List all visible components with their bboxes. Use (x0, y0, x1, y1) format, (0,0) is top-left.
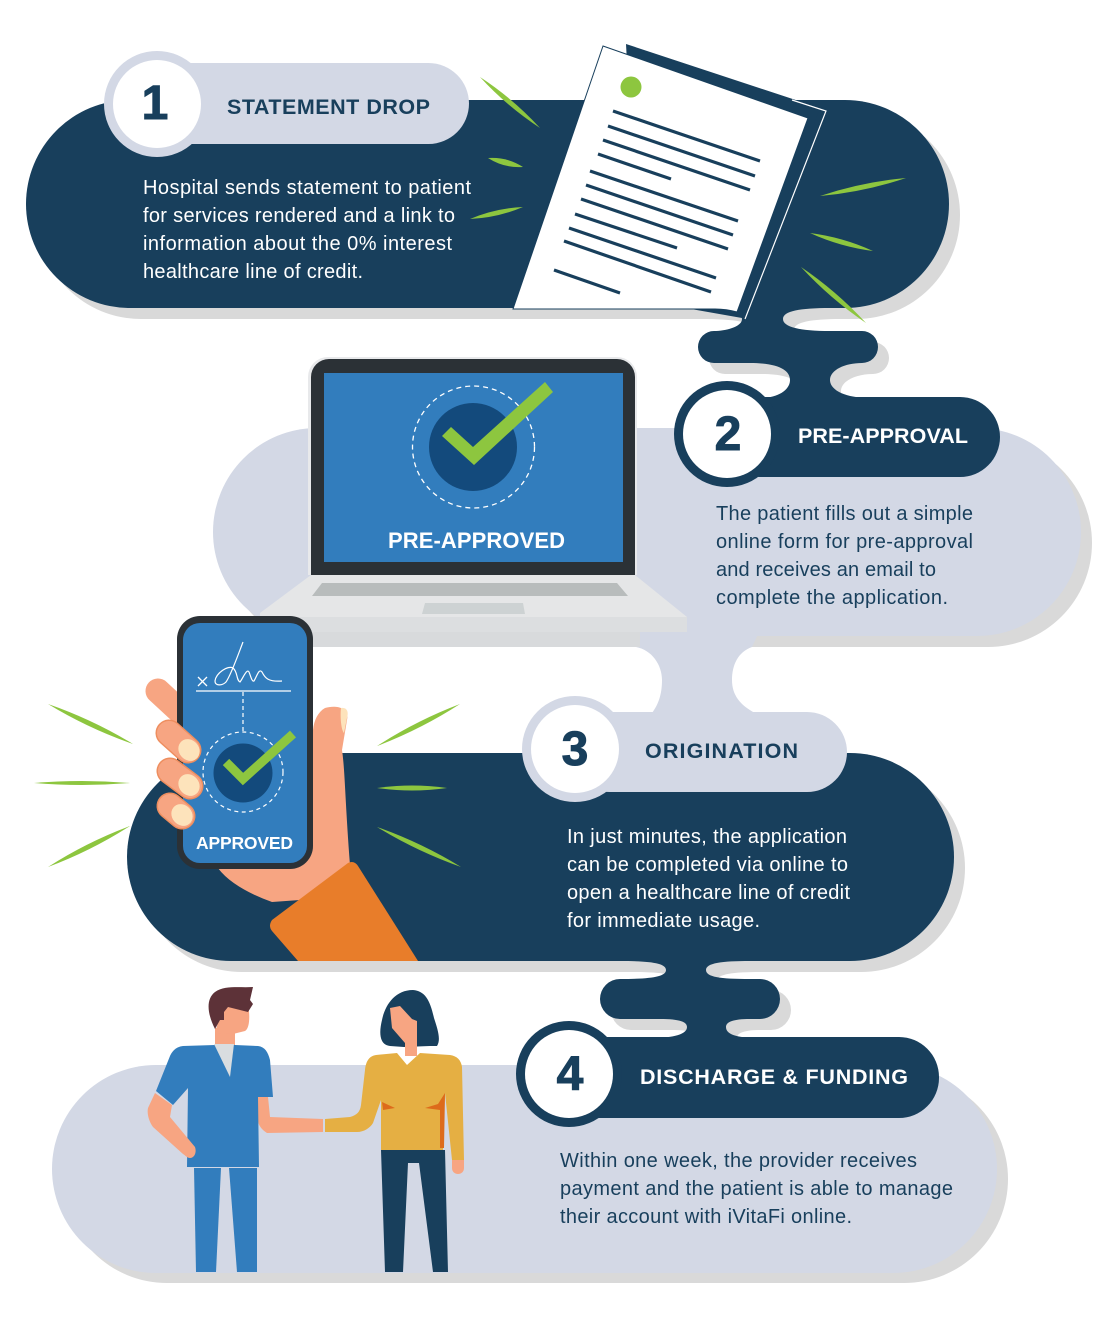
illustration: hand holding phone: APPROVED (196, 833, 293, 853)
text: step 3 description: for immediate usage. (567, 910, 760, 932)
text: step 3 description: open a healthcare line of credit (567, 882, 850, 904)
text: step 3 description: In just minutes, the application (567, 826, 847, 848)
text: step 2 description: online form for pre-approval (716, 531, 973, 553)
illustration: laptop: PRE-APPROVED (388, 528, 565, 553)
text: step 1 description: for services rendered and a link to (143, 205, 455, 227)
heading: statement drop: STATEMENT DROP (227, 95, 430, 119)
illustration: document (513, 44, 826, 319)
step 2 badge: 2 (715, 408, 741, 461)
heading: pre-approval: PRE-APPROVAL (798, 424, 968, 448)
text: step 4 description: their account with iVitaFi online. (560, 1206, 852, 1228)
panel: step 2 background (213, 428, 1081, 713)
text: step 1 description: Hospital sends statement to patient (143, 177, 471, 199)
text: step 2 description: The patient fills out a simple (716, 503, 973, 525)
text: step 4 description (560, 1150, 953, 1228)
panel: step 1 background (26, 100, 949, 398)
illustration: hand holding phone (158, 616, 418, 961)
text: step 1 description: healthcare line of credit. (143, 261, 363, 283)
heading: discharge and funding: DISCHARGE & FUNDING (640, 1065, 908, 1089)
illustration: laptop (260, 357, 687, 647)
step 1 badge: 1 (142, 77, 168, 130)
illustration: patient (325, 990, 464, 1272)
text: step 1 description (143, 177, 471, 283)
illustration: doctor (148, 987, 323, 1272)
panel: step 3 background (127, 753, 954, 1038)
text: step 1 description: information about the 0% interest (143, 233, 452, 255)
step 1 badge (104, 51, 469, 157)
step 3 badge: 3 (562, 723, 588, 776)
step 4 badge: 4 (557, 1048, 584, 1101)
icon: green sparks around phone (34, 704, 461, 867)
step 4 badge (516, 1021, 939, 1127)
panel: step 4 background (52, 1065, 997, 1273)
step 2 badge (674, 381, 1000, 487)
step 3 badge (522, 696, 847, 802)
text: step 4 description: payment and the patient is able to manage (560, 1178, 953, 1200)
icon: green sparks around document (470, 77, 906, 323)
heading: origination: ORIGINATION (645, 739, 798, 763)
text: step 2 description: and receives an email to (716, 559, 936, 581)
text: step 3 description: can be completed via online to (567, 854, 848, 876)
text: step 2 description (716, 503, 973, 609)
text: step 3 description (567, 826, 850, 932)
text: step 2 description: complete the application. (716, 587, 948, 609)
text: step 4 description: Within one week, the provider receives (560, 1150, 917, 1172)
